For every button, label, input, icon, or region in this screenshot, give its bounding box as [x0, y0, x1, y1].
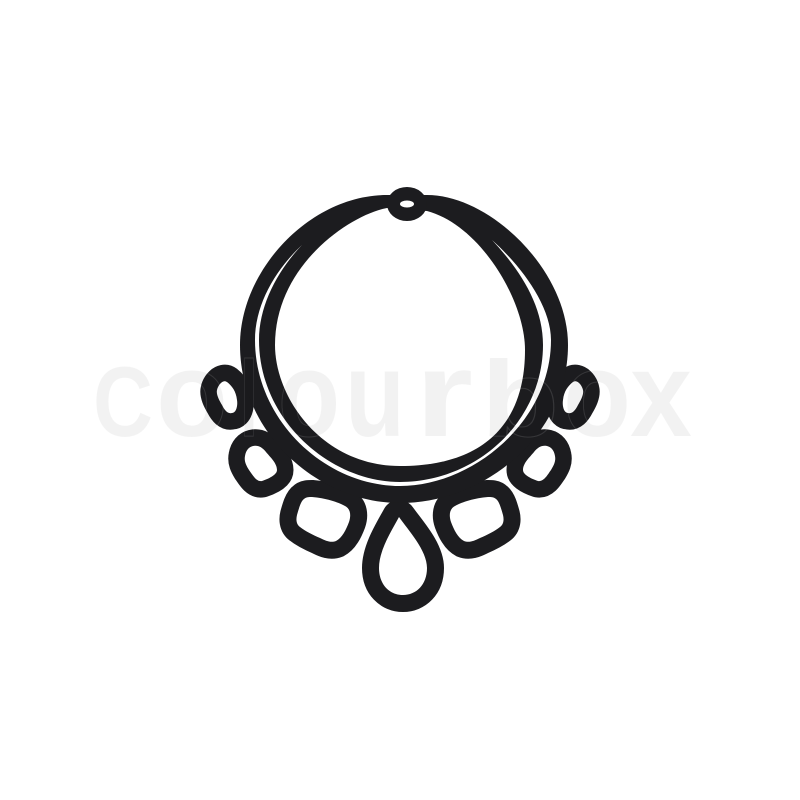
watermark: x: [630, 326, 692, 462]
bead: left side oval: [217, 381, 237, 413]
watermark: C: [93, 346, 153, 457]
bead: left rounded: [245, 446, 277, 481]
inner opening: [275, 208, 525, 466]
watermark: o: [278, 326, 340, 462]
bead: right large rounded: [450, 497, 504, 542]
watermark: b: [481, 338, 559, 459]
bead: right rounded: [523, 446, 555, 481]
watermark: r: [415, 326, 473, 462]
watermark: o: [156, 326, 228, 462]
watermark: u: [345, 326, 405, 462]
gap between strands: [255, 240, 551, 486]
clasp: [387, 187, 427, 221]
watermark: l: [240, 338, 258, 459]
watermark: o: [563, 326, 631, 462]
bead: right side oval: [563, 381, 583, 413]
necklace icon: [217, 187, 583, 595]
watermark: [93, 326, 692, 462]
outer band silhouette: [240, 195, 568, 503]
bead: center teardrop: [379, 517, 427, 595]
bead: left large rounded: [296, 497, 350, 542]
